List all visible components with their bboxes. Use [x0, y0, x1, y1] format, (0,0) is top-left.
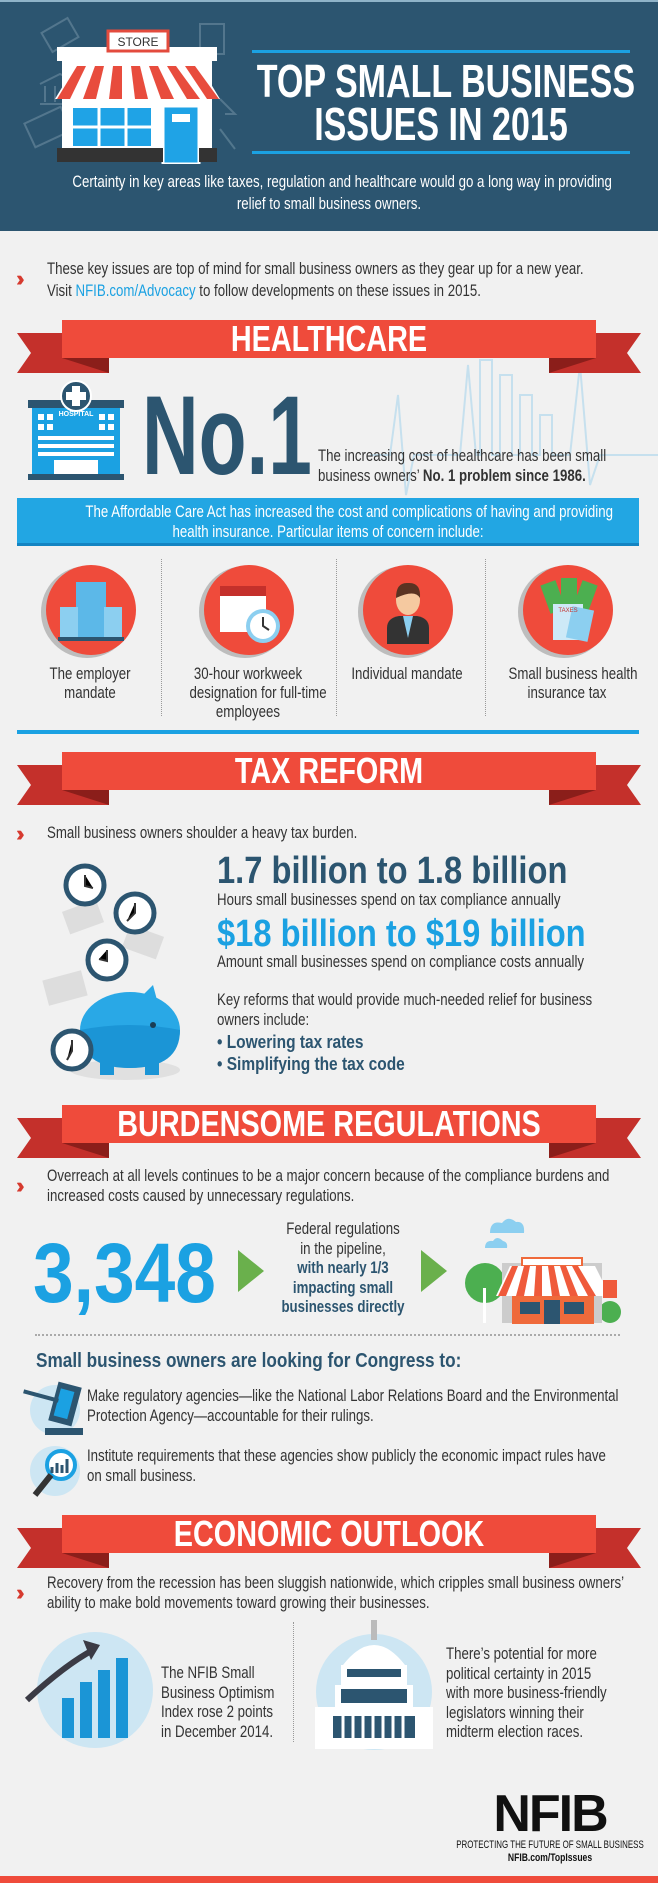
- item: gavel: [23, 1382, 618, 1435]
- text: overreach: Overreach at all levels continues to be a major concern because of the compliance burdens and: [47, 1166, 609, 1185]
- text: overreach: [16, 1166, 609, 1205]
- text: federal regulations: Federal regulations: [286, 1219, 400, 1238]
- arrow: green 1: [238, 1250, 264, 1292]
- item: 30-hour workweek: employees: [216, 702, 280, 721]
- panel: optimism index: The NFIB Small: [161, 1663, 255, 1682]
- item: employer mandate: The employer: [49, 664, 131, 683]
- item: 30-hour workweek: [190, 565, 327, 721]
- subtitle: relief to small business owners.: [237, 194, 421, 213]
- intro text: These key issues are top of mind for small business owners as they gear up for a new year.: [47, 259, 584, 278]
- item: individual mandate: Individual mandate: [351, 664, 463, 683]
- text: key reforms: • Simplifying the tax code: [217, 1054, 405, 1074]
- panel: political certainty: legislators winning their: [446, 1702, 584, 1722]
- ribbon: economic outlook: ECONOMIC OUTLOOK: [174, 1513, 484, 1554]
- intro text: [16, 259, 584, 300]
- text: federal regulations: businesses directly: [281, 1297, 405, 1316]
- item: health insurance tax: [508, 565, 637, 702]
- intro text: ››: [16, 266, 19, 291]
- stat: hours: 1.7 billion to 1.8 billion: [217, 850, 567, 892]
- panel: optimism index: [25, 1632, 274, 1748]
- panel: optimism index: Business Optimism: [161, 1682, 274, 1702]
- ribbon: tax reform: TAX REFORM: [235, 750, 423, 791]
- panel: political certainty: with more business-friendly: [446, 1683, 607, 1702]
- logo: NFIB: NFIB: [493, 1785, 607, 1843]
- text: federal regulations: with nearly 1/3: [297, 1258, 389, 1277]
- text: recovery: ability to make bold movements toward growing their businesses.: [47, 1593, 430, 1612]
- panel: political certainty: [315, 1620, 607, 1750]
- ribbon: healthcare: HEALTHCARE: [231, 318, 427, 359]
- text: overreach: ››: [16, 1173, 19, 1198]
- text: overreach: increased costs caused by unnecessary regulations.: [47, 1186, 354, 1205]
- ribbon: burdensome regulations: [17, 1103, 641, 1158]
- icon: small store with tree: [465, 1218, 621, 1324]
- text: recovery: Recovery from the recession has been sluggish nationwide, which cripples small business owners’: [47, 1573, 624, 1592]
- heading: congress: Small business owners are looking for Congress to:: [36, 1350, 461, 1372]
- stat: dollars: $18 billion to $19 billion: [217, 913, 586, 955]
- item: individual mandate: [351, 565, 463, 683]
- item: employer mandate: [41, 565, 136, 702]
- text: healthcare cost: The increasing cost of healthcare has been small: [318, 446, 606, 465]
- item: 30-hour workweek: 30-hour workweek: [194, 664, 302, 683]
- icon: storefront: [23, 16, 238, 164]
- icon: hospital: [28, 380, 124, 480]
- text: key reforms: • Lowering tax rates: [217, 1032, 364, 1052]
- text: healthcare cost: business owners’ No. 1 problem since 1986.: [318, 466, 586, 485]
- concern items: [41, 559, 637, 721]
- item: gavel: Protection Agency—accountable for their rulings.: [87, 1406, 374, 1425]
- ribbon: burdensome regulations: BURDENSOME REGULATIONS: [117, 1103, 541, 1144]
- text: heavy tax burden: Small business owners shoulder a heavy tax burden.: [47, 823, 357, 842]
- icon: storefront: STORE: [117, 35, 159, 49]
- ribbon: tax reform: [17, 750, 641, 805]
- logo: NFIB: [456, 1785, 644, 1864]
- text: federal regulations: [281, 1219, 405, 1316]
- banner: affordable care act: The Affordable Care Act has increased the cost and complications of having and providing: [85, 502, 613, 521]
- text: heavy tax burden: ››: [16, 821, 19, 846]
- title: TOP SMALL BUSINESS: [257, 55, 635, 107]
- panel: optimism index: Index rose 2 points: [161, 1702, 273, 1721]
- ECG background decoration: [370, 359, 658, 496]
- panel: political certainty: midterm election races.: [446, 1722, 583, 1741]
- title: [252, 50, 630, 154]
- item: magnifier: [30, 1446, 606, 1497]
- text: federal regulations: in the pipeline,: [300, 1238, 386, 1258]
- icon: piggy bank with clocks: [42, 864, 180, 1080]
- panel: political certainty: political certainty in 2015: [446, 1664, 591, 1682]
- text: federal regulations: impacting small: [293, 1278, 393, 1296]
- ribbon: economic outlook: [17, 1513, 641, 1568]
- logo: NFIB: NFIB.com/TopIssues: [508, 1852, 592, 1864]
- item: 30-hour workweek: designation for full-time: [190, 683, 327, 702]
- panel: political certainty: There’s potential for more: [446, 1644, 597, 1663]
- text: recovery: ››: [16, 1580, 19, 1605]
- banner: affordable care act: [17, 498, 639, 546]
- item: health insurance tax: insurance tax: [528, 683, 606, 702]
- subtitle: [72, 172, 612, 213]
- arrow: green 2: [421, 1250, 447, 1292]
- logo: NFIB: PROTECTING THE FUTURE OF SMALL BUSINESS: [456, 1839, 644, 1851]
- banner: affordable care act: health insurance. Particular items of concern include:: [172, 522, 484, 541]
- big stat: 3,348: 3,348: [33, 1226, 216, 1320]
- big stat: No.1: No.1: [142, 373, 312, 498]
- panel: optimism index: in December 2014.: [161, 1722, 273, 1740]
- item: magnifier: Institute requirements that these agencies show publicly the economic impact rules have: [87, 1446, 606, 1465]
- ribbon: healthcare: [17, 318, 641, 373]
- text: key reforms: Key reforms that would provide much-needed relief for business: [217, 990, 592, 1009]
- intro text: Visit NFIB.com/Advocacy to follow developments on these issues in 2015.: [47, 281, 481, 300]
- stat: hours: Hours small businesses spend on tax compliance annually: [217, 890, 560, 909]
- text: heavy tax burden: [16, 821, 357, 846]
- item: health insurance tax: TAXES: [558, 608, 578, 614]
- icon: hospital: HOSPITAL: [59, 411, 94, 418]
- item: gavel: Make regulatory agencies—like the National Labor Relations Board and the Environmental: [87, 1386, 618, 1405]
- header band: [0, 0, 658, 231]
- text: recovery: [16, 1573, 624, 1612]
- subtitle: Certainty in key areas like taxes, regulation and healthcare would go a long way in providing: [72, 172, 612, 191]
- title: ISSUES IN 2015: [314, 98, 568, 150]
- text: key reforms: [217, 990, 592, 1074]
- item: magnifier: on small business.: [87, 1466, 196, 1485]
- text: key reforms: owners include:: [217, 1010, 309, 1029]
- stat: dollars: Amount small businesses spend on compliance costs annually: [217, 952, 584, 971]
- item: employer mandate: mandate: [64, 683, 116, 702]
- item: health insurance tax: Small business health: [508, 664, 637, 683]
- text: healthcare cost: [318, 446, 606, 485]
